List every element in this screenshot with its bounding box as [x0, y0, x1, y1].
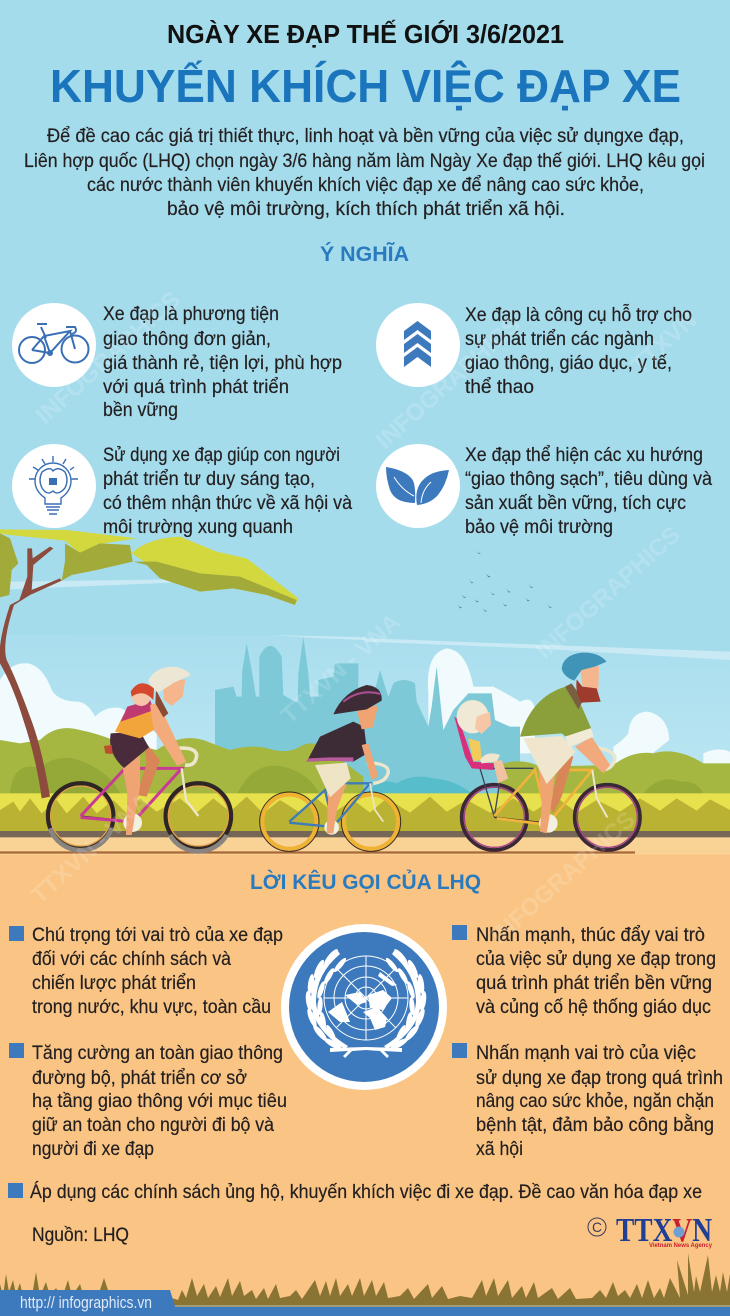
- bullet block: left 2: [9, 1043, 287, 1160]
- icon: chevrons: [376, 303, 460, 387]
- city skyline: [215, 637, 520, 795]
- text: meaning 1: giá thành rẻ, tiện lợi, phù hợp: [103, 353, 342, 374]
- bullet block: left 2: giữ an toàn cho người đi bộ và: [32, 1115, 274, 1136]
- text: meaning 1: bền vững: [103, 400, 178, 421]
- cyclist: mother and baby: [48, 667, 231, 851]
- watermarks: INFOGRAPHICS: [371, 311, 526, 454]
- text: meaning 1: [103, 304, 342, 421]
- bullet block: left 1: chiến lược phát triển: [32, 973, 196, 994]
- icon: light bulb brain: [12, 444, 96, 528]
- cyclist: father and child: [454, 653, 640, 850]
- text: meaning 2: sự phát triển các ngành: [465, 329, 654, 350]
- lower sky: [0, 635, 730, 797]
- footer band: http:// infographics.vn: [20, 1293, 152, 1312]
- bullet block: left 2: hạ tầng giao thông với mục tiêu: [32, 1091, 287, 1112]
- bullet block: full width: Áp dụng các chính sách ủng hộ, khuyến khích việc đi xe đạp. Đề cao văn hóa đạp xe: [30, 1182, 702, 1203]
- text: meaning 3: môi trường xung quanh: [103, 517, 293, 538]
- sky streaks: [10, 579, 730, 660]
- text: meaning 1: giao thông đơn giản,: [103, 329, 271, 350]
- text: meaning 3: có thêm nhận thức về xã hội và: [103, 493, 352, 514]
- icon: bicycle: [12, 303, 96, 387]
- logo: ttxvn: Vietnam News Agency: [649, 1242, 712, 1249]
- bullet block: right 1: Nhấn mạnh, thúc đẩy vai trò: [476, 925, 705, 946]
- text: meaning 2: giao thông, giáo dục, y tế,: [465, 353, 672, 374]
- heading: un appeal: LỜI KÊU GỌI CỦA LHQ: [250, 870, 481, 894]
- text: meaning 2: thể thao: [465, 377, 534, 398]
- intro text: [24, 126, 705, 220]
- clouds: [0, 648, 730, 763]
- intro text: bảo vệ môi trường, kích thích phát triển xã hội.: [167, 199, 565, 220]
- title: [50, 19, 681, 112]
- text: meaning 3: phát triển tư duy sáng tạo,: [103, 469, 315, 490]
- bushes: [0, 728, 363, 795]
- watermarks: INFOGRAPHICS: [31, 286, 186, 429]
- bullet block: right 2: bệnh tật, đảm bảo công bằng: [476, 1114, 714, 1136]
- text: meaning 4: Xe đạp thể hiện các xu hướng: [465, 445, 703, 466]
- logo: ttxvn: C: [592, 1219, 602, 1235]
- cyclist: child: [260, 685, 401, 851]
- bullet block: right 2: nâng cao sức khỏe, ngăn chặn: [476, 1091, 714, 1112]
- bullet block: right 2: Nhấn mạnh vai trò của việc: [476, 1043, 696, 1064]
- text: meaning 2: Xe đạp là công cụ hỗ trợ cho: [465, 304, 692, 326]
- bullet block: left 1: trong nước, khu vực, toàn cầu: [32, 997, 271, 1018]
- intro text: Để đề cao các giá trị thiết thực, linh hoạt và bền vững của việc sử dụngxe đạp,: [47, 126, 684, 147]
- bullet block: right 2: xã hội: [476, 1139, 523, 1160]
- text: meaning 1: với quá trình phát triển: [103, 377, 289, 398]
- background: sky: [0, 0, 730, 850]
- text: meaning 3: [103, 445, 352, 538]
- icon: leaves: [376, 444, 460, 528]
- road: [0, 831, 730, 838]
- bullet block: right 1: quá trình phát triển bền vững: [476, 973, 712, 994]
- grass band: [0, 793, 730, 832]
- watermarks: [26, 286, 702, 949]
- text: meaning 4: sản xuất bền vững, tích cực: [465, 493, 686, 514]
- logo: ttxvn: TTXVN: [616, 1212, 712, 1249]
- bullet block: right 1: [452, 925, 716, 1018]
- bullet block: left 2: đường bộ, phát triển cơ sở: [32, 1068, 247, 1089]
- bullet block: right 1: và củng cố hệ thống giáo dục: [476, 997, 711, 1018]
- bullet block: left 1: Chú trọng tới vai trò của xe đạp: [32, 925, 283, 946]
- text: meaning 4: bảo vệ môi trường: [465, 517, 613, 538]
- bullet block: left 1: [9, 925, 283, 1018]
- intro text: các nước thành viên khuyến khích việc đạp xe để nâng cao sức khỏe,: [87, 175, 644, 196]
- watermarks: INFOGRAPHICS: [486, 806, 641, 949]
- text: meaning 4: “giao thông sạch”, tiêu dùng và: [465, 469, 712, 490]
- watermarks: TTXVN - VNA: [26, 789, 156, 909]
- watermarks: INFOGRAPHICS: [531, 521, 686, 664]
- footer band: [0, 1290, 730, 1316]
- bullet block: left 2: người đi xe đạp: [32, 1139, 154, 1160]
- title: KHUYẾN KHÍCH VIỆC ĐẠP XE: [50, 60, 681, 112]
- teal bushes: [367, 777, 473, 795]
- bullet block: right 1: của việc sử dụng xe đạp trong: [476, 949, 716, 970]
- text: meaning 2: [465, 304, 692, 398]
- text: meaning 1: Xe đạp là phương tiện: [103, 304, 279, 325]
- bullet block: right 2: [452, 1043, 723, 1160]
- title: NGÀY XE ĐẠP THẾ GIỚI 3/6/2021: [167, 19, 564, 49]
- background: sand: [0, 850, 730, 1316]
- bullet block: right 2: sử dụng xe đạp trong quá trình: [476, 1068, 723, 1089]
- bullet block: left 1: đối với các chính sách và: [32, 949, 231, 970]
- watermarks: TTXVN - VNA: [276, 609, 406, 729]
- text: meaning 4: [465, 445, 712, 538]
- watermarks: TTXVN: [626, 307, 702, 379]
- birds: [457, 551, 552, 612]
- bullet block: left 2: Tăng cường an toàn giao thông: [32, 1043, 283, 1064]
- tree: [0, 529, 298, 798]
- source: Nguồn: LHQ: [32, 1225, 129, 1246]
- text: meaning 3: Sử dụng xe đạp giúp con người: [103, 445, 340, 466]
- heading: y nghia: Ý NGHĨA: [320, 242, 409, 266]
- illustration: cycling family scene: [0, 529, 730, 855]
- grass footer: [0, 1253, 730, 1305]
- un emblem: [281, 924, 447, 1090]
